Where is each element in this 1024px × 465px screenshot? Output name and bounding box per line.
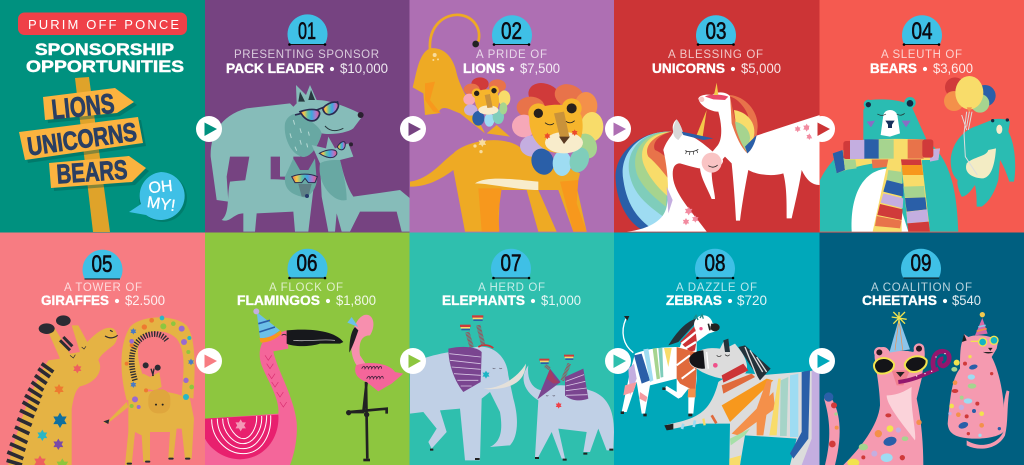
label: a flock of flamingos, $1,800: A FLOCK OF (269, 282, 343, 294)
label: a sleuth of bears, $3,600: A SLEUTH OF (881, 49, 962, 61)
label: a tower of giraffes, $2.500: A TOWER OF (64, 282, 142, 294)
number badge 08: 08 (704, 250, 726, 277)
label: a herd of elephants, $1,000 (442, 282, 581, 308)
label: a herd of elephants, $1,000: $1,000 (541, 292, 581, 308)
label: a coalition of cheetahs, $540: $540 (952, 292, 981, 308)
arrow: play button (605, 116, 631, 142)
illustration: wolves (211, 85, 410, 232)
callout: oh my speech bubble: OH (148, 178, 173, 197)
number badge 05 (83, 250, 122, 279)
label: presenting sponsor, pack leader, $10,000 (226, 49, 388, 76)
arrow: play button (809, 116, 835, 142)
icon: signpost: BEARS (56, 155, 128, 189)
number badge 09 (901, 249, 941, 278)
number badge 07 (491, 249, 531, 279)
panel 02: lions (400, 0, 614, 232)
number badge 05: 05 (92, 251, 112, 278)
panel 06: flamingos (196, 232, 410, 465)
label: a dazzle of zebras, $720: $720 (737, 292, 767, 308)
label: a coalition of cheetahs, $540: CHEETAHS (862, 292, 937, 308)
label: a pride of lions, $7,500: LIONS (463, 60, 505, 76)
label: a flock of flamingos, $1,800 (237, 282, 376, 308)
arrow: play button (809, 348, 835, 374)
label: a flock of flamingos, $1,800: $1,800 (336, 292, 376, 308)
illustration: giraffes (7, 315, 195, 465)
number badge 03: 03 (706, 18, 726, 45)
label: a pride of lions, $7,500 (463, 49, 560, 76)
label: presenting sponsor, pack leader, $10,000: $10,000 (340, 60, 388, 76)
arrow: play button (400, 348, 426, 374)
number badge 08 (695, 249, 735, 279)
illustration: zebras (621, 315, 820, 465)
illustration: lions (410, 15, 603, 232)
illustration: unicorns (616, 83, 820, 232)
icon: signpost (19, 77, 149, 232)
number badge 03 (696, 15, 736, 46)
number badge 02 (492, 15, 532, 46)
number badge 04 (902, 15, 942, 46)
panel 04: bears (809, 0, 1024, 232)
label: a blessing of unicorns, $5,000: UNICORNS (652, 60, 725, 76)
panel 07: elephants (400, 232, 614, 465)
label: a sleuth of bears, $3,600: BEARS (870, 60, 917, 76)
panel 03: unicorns (605, 0, 820, 232)
heading: sponsorship opportunities: SPONSORSHIP (35, 41, 174, 59)
arrow: play button (196, 348, 222, 374)
label: a pride of lions, $7,500: A PRIDE OF (476, 49, 547, 61)
number badge 06: 06 (296, 250, 318, 277)
label: a dazzle of zebras, $720 (666, 282, 767, 308)
arrow: play button (196, 116, 222, 142)
number badge 01 (288, 14, 328, 46)
number badge 02: 02 (501, 18, 522, 45)
illustration: elephants (410, 315, 614, 461)
label: a tower of giraffes, $2.500 (41, 282, 165, 308)
label: a dazzle of zebras, $720: ZEBRAS (666, 292, 722, 308)
label: presenting sponsor, pack leader, $10,000: PRESENTING SPONSOR (234, 49, 379, 61)
label: a blessing of unicorns, $5,000: A BLESSING OF (668, 49, 763, 61)
label: presenting sponsor, pack leader, $10,000: PACK LEADER (226, 60, 324, 76)
label: a blessing of unicorns, $5,000: $5,000 (741, 60, 781, 76)
heading: sponsorship opportunities: OPPORTUNITIES (26, 58, 184, 76)
label: a sleuth of bears, $3,600 (870, 49, 973, 76)
heading: sponsorship opportunities (26, 41, 184, 76)
panel: title and signpost (0, 0, 205, 232)
label: a coalition of cheetahs, $540 (862, 282, 981, 308)
illustration: flamingos (205, 308, 403, 465)
number badge 07: 07 (500, 250, 522, 277)
number badge 09: 09 (910, 250, 932, 277)
illustration: bears (820, 76, 1015, 232)
illustration: cheetahs (824, 312, 1009, 465)
callout: oh my speech bubble (129, 172, 187, 222)
label: a herd of elephants, $1,000: A HERD OF (478, 282, 545, 294)
label: a tower of giraffes, $2.500: GIRAFFES (41, 292, 109, 308)
label: a flock of flamingos, $1,800: FLAMINGOS (237, 292, 320, 308)
number badge 01: 01 (298, 18, 316, 45)
icon: signpost: LIONS (50, 88, 116, 125)
panel 08: zebras (605, 232, 820, 465)
label: a herd of elephants, $1,000: ELEPHANTS (442, 292, 525, 308)
panel 01: pack leader (196, 0, 410, 232)
banner: Purim Off Ponce: PURIM OFF PONCE (28, 17, 179, 32)
label: a pride of lions, $7,500: $7,500 (520, 60, 560, 76)
icon: signpost: UNICORNS (25, 116, 139, 162)
number badge 06 (288, 249, 328, 279)
label: a dazzle of zebras, $720: A DAZZLE OF (676, 282, 757, 294)
panel 05: giraffes (0, 232, 205, 465)
banner: Purim Off Ponce (18, 12, 187, 35)
label: a coalition of cheetahs, $540: A COALITION OF (871, 282, 972, 294)
arrow: play button (400, 116, 426, 142)
arrow: play button (605, 348, 631, 374)
callout: oh my speech bubble: MY! (146, 194, 176, 215)
panel 09: cheetahs (809, 232, 1024, 465)
number badge 04: 04 (912, 18, 932, 45)
label: a blessing of unicorns, $5,000 (652, 49, 781, 76)
label: a sleuth of bears, $3,600: $3,600 (933, 60, 973, 76)
label: a tower of giraffes, $2.500: $2.500 (125, 292, 165, 308)
